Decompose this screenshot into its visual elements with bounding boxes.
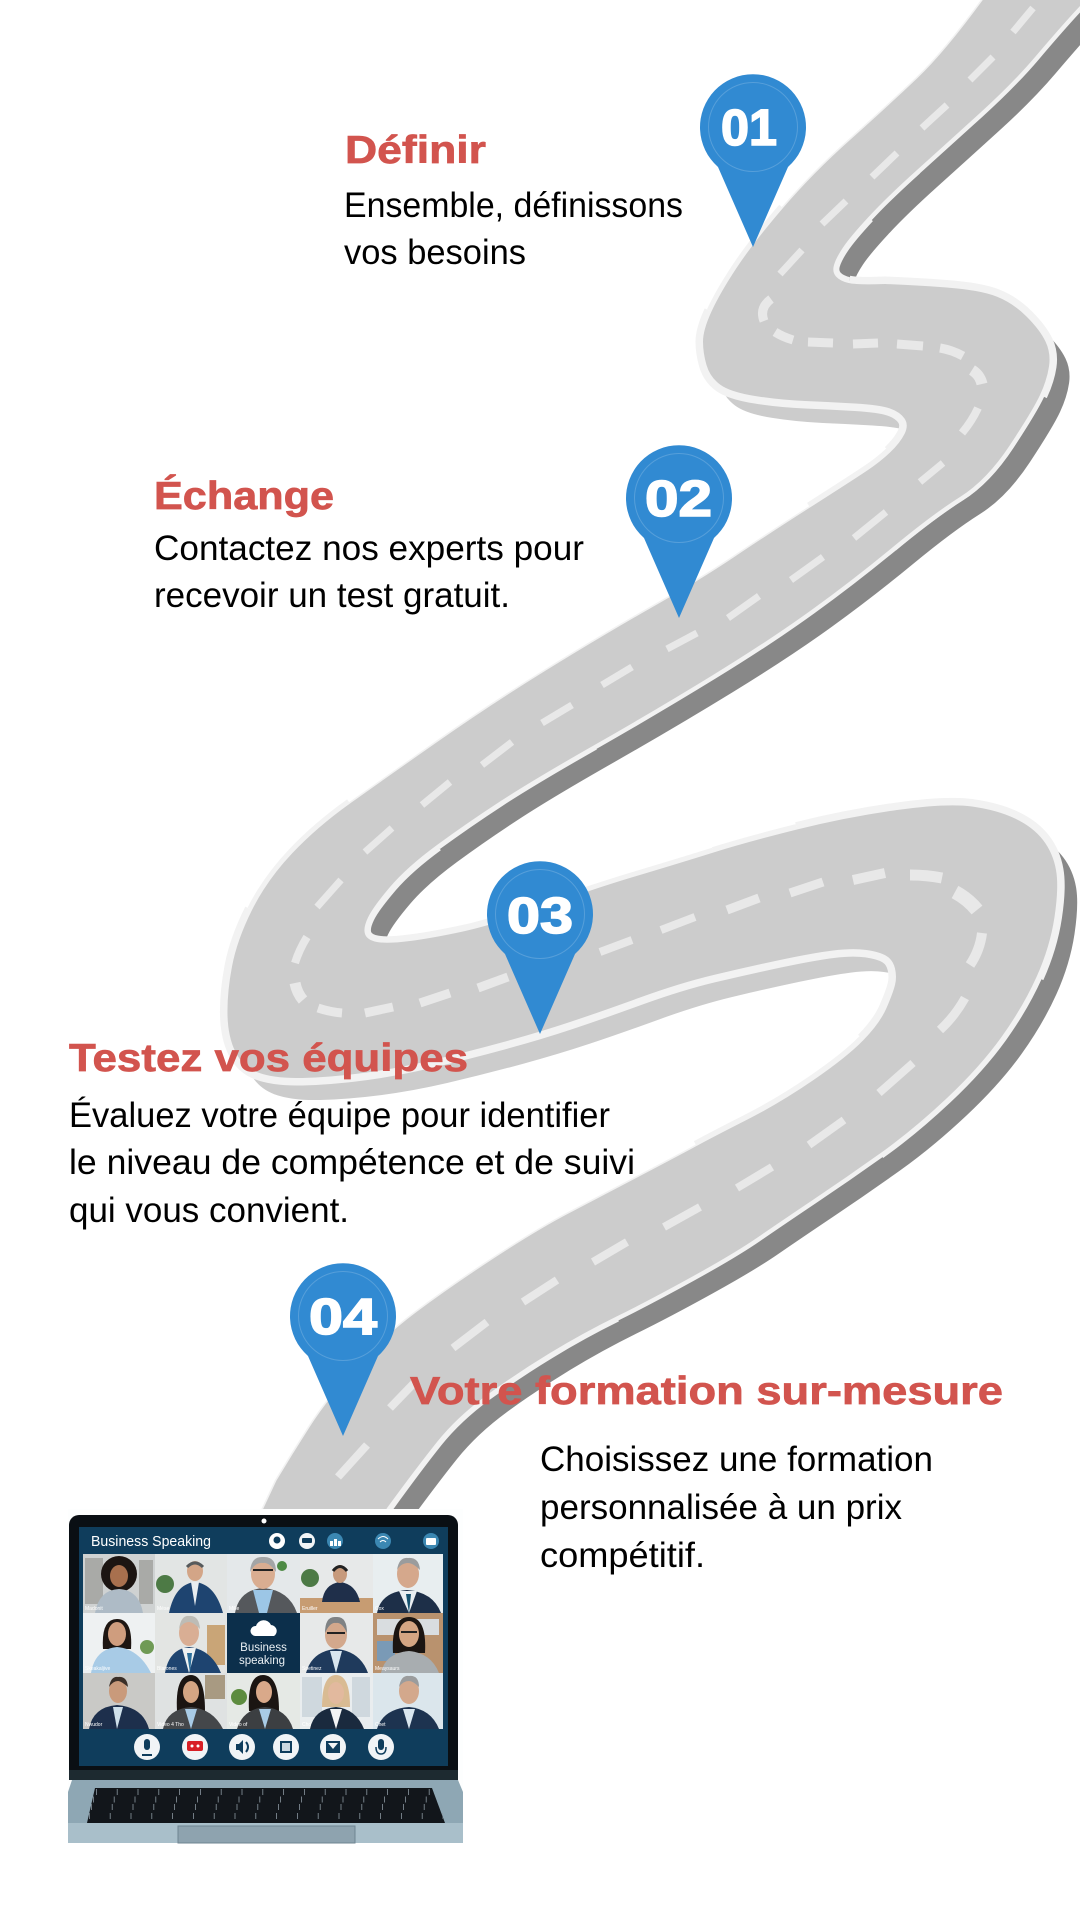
screen — [79, 1527, 448, 1766]
description step 1: Ensemble, définissons — [344, 186, 683, 225]
call controls — [134, 1734, 394, 1760]
screen bezel — [69, 1515, 458, 1780]
road centre dashes — [295, 8, 1033, 1477]
video grid row 1 — [83, 1554, 443, 1613]
description step 4: compétitif. — [540, 1536, 705, 1575]
laptop illustration — [68, 1509, 463, 1843]
video grid row 3 — [83, 1673, 443, 1729]
pin 02: 02 — [645, 470, 712, 527]
video grid row 2: Skeakaljive — [85, 1666, 111, 1672]
pin 02 — [626, 445, 732, 618]
video grid row 1: Mése — [157, 1606, 169, 1612]
description step 3 — [69, 1096, 635, 1230]
video grid row 3: Video 4 Tho — [157, 1722, 184, 1728]
video grid row 2: Spetinez — [302, 1666, 322, 1672]
hinge — [69, 1770, 458, 1780]
description step 4: personnalisée à un prix — [540, 1488, 902, 1527]
centre tile: Business speaking: speaking — [239, 1655, 285, 1667]
video grid row 3: Video of — [229, 1722, 248, 1728]
description step 1 — [344, 186, 683, 272]
video grid row 1: Madonit — [85, 1606, 103, 1612]
road light underside at bends — [254, 396, 900, 1100]
step 4 text — [410, 1370, 1003, 1575]
step 3 text — [69, 1037, 635, 1230]
description step 2: Contactez nos experts pour — [154, 529, 584, 568]
step 1 text — [344, 129, 683, 272]
description step 3: qui vous convient. — [69, 1191, 349, 1230]
road side shadow — [370, 12, 1080, 1509]
video grid row 3: Cho — [302, 1722, 311, 1728]
description step 3: le niveau de compétence et de suivi — [69, 1143, 635, 1182]
heading: Définir: Définir — [345, 129, 486, 172]
heading: Votre formation sur-mesure: Votre formation sur-mesure — [410, 1370, 1003, 1413]
header icons — [269, 1533, 439, 1549]
heading: Testez vos équipes: Testez vos équipes — [69, 1037, 468, 1080]
video grid row 2: Blarones — [157, 1666, 177, 1672]
video grid row 2 — [83, 1613, 443, 1673]
heading: Échange: Échange — [154, 474, 334, 518]
description step 2: recevoir un test gratuit. — [154, 576, 510, 615]
video grid row 1: Mille — [229, 1606, 239, 1612]
video grid row 2: Meaysaurs — [375, 1666, 400, 1672]
description step 3: Évaluez votre équipe pour identifier — [69, 1096, 610, 1135]
video grid row 3: Chet — [375, 1722, 386, 1728]
winding road — [227, 0, 1080, 1537]
trackpad — [178, 1826, 355, 1843]
pin 01: 01 — [721, 99, 777, 156]
keyboard — [87, 1788, 445, 1823]
webcam — [262, 1518, 266, 1524]
centre tile: Business speaking: Business — [240, 1642, 287, 1654]
pin 03 — [487, 861, 593, 1034]
pin 03: 03 — [507, 887, 573, 944]
pin 01 — [700, 74, 806, 247]
pin 04: 04 — [309, 1288, 378, 1345]
description step 4: Choisissez une formation — [540, 1440, 933, 1479]
video grid row 1: Eruiller — [302, 1606, 318, 1612]
screen title: Business Speaking — [91, 1533, 211, 1550]
pin 04 — [290, 1263, 396, 1436]
laptop base — [68, 1780, 463, 1843]
video grid row 1: Cox — [375, 1606, 384, 1612]
description step 4 — [540, 1440, 933, 1575]
step 2 text — [154, 474, 584, 615]
video grid row 3: Nwudor — [85, 1722, 103, 1728]
description step 2 — [154, 529, 584, 615]
road white border — [227, 0, 1080, 1521]
description step 1: vos besoins — [344, 233, 526, 272]
centre tile: Business speaking — [227, 1613, 300, 1673]
road surface — [227, 0, 1080, 1520]
